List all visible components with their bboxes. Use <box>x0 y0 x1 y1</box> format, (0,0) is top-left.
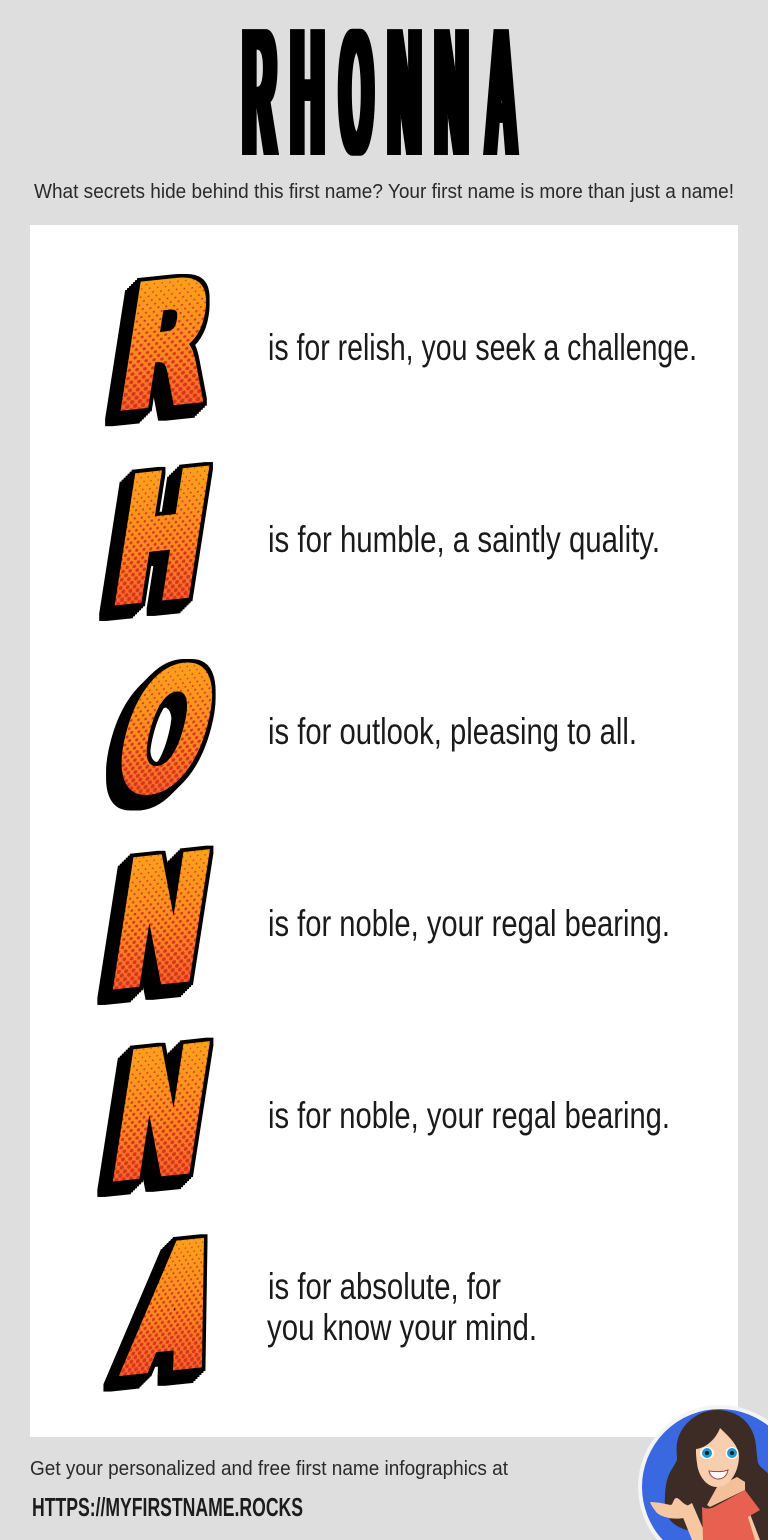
letter A: A <box>121 1217 228 1402</box>
eyes <box>700 1447 714 1459</box>
footer text: Get your personalized and free first name infographics at <box>30 1458 508 1480</box>
letter H: H <box>104 439 219 639</box>
smile <box>709 1470 728 1479</box>
meaning H: is for humble, a saintly quality. <box>268 519 660 560</box>
title <box>243 0 516 195</box>
face <box>696 1428 739 1487</box>
right arm <box>748 1516 760 1540</box>
shirt <box>702 1490 760 1540</box>
neck <box>707 1477 745 1507</box>
icon: avatar <box>640 1407 768 1540</box>
meaning O: is for outlook, pleasing to all. <box>268 711 637 752</box>
meaning N: is for noble, your regal bearing. <box>268 903 670 944</box>
left arm <box>683 1503 703 1540</box>
icon: comic letters <box>97 244 235 1402</box>
letter O: O <box>97 630 235 834</box>
panel: letters <box>30 225 738 1437</box>
hand <box>650 1498 692 1519</box>
footer url: HTTPS://MYFIRSTNAME.ROCKS <box>32 1492 303 1522</box>
meaning N second: is for noble, your regal bearing. <box>268 1095 670 1136</box>
subtitle: What secrets hide behind this first name? Your first name is more than just a name! <box>34 181 734 203</box>
letter N second: N <box>102 1013 220 1215</box>
letter R: R <box>108 244 225 446</box>
meaning A: is for absolute, for <box>268 1266 501 1307</box>
meaning A: you know your mind. <box>267 1307 537 1348</box>
letter N: N <box>102 821 220 1023</box>
meaning A <box>267 1266 537 1348</box>
hair <box>665 1410 768 1540</box>
